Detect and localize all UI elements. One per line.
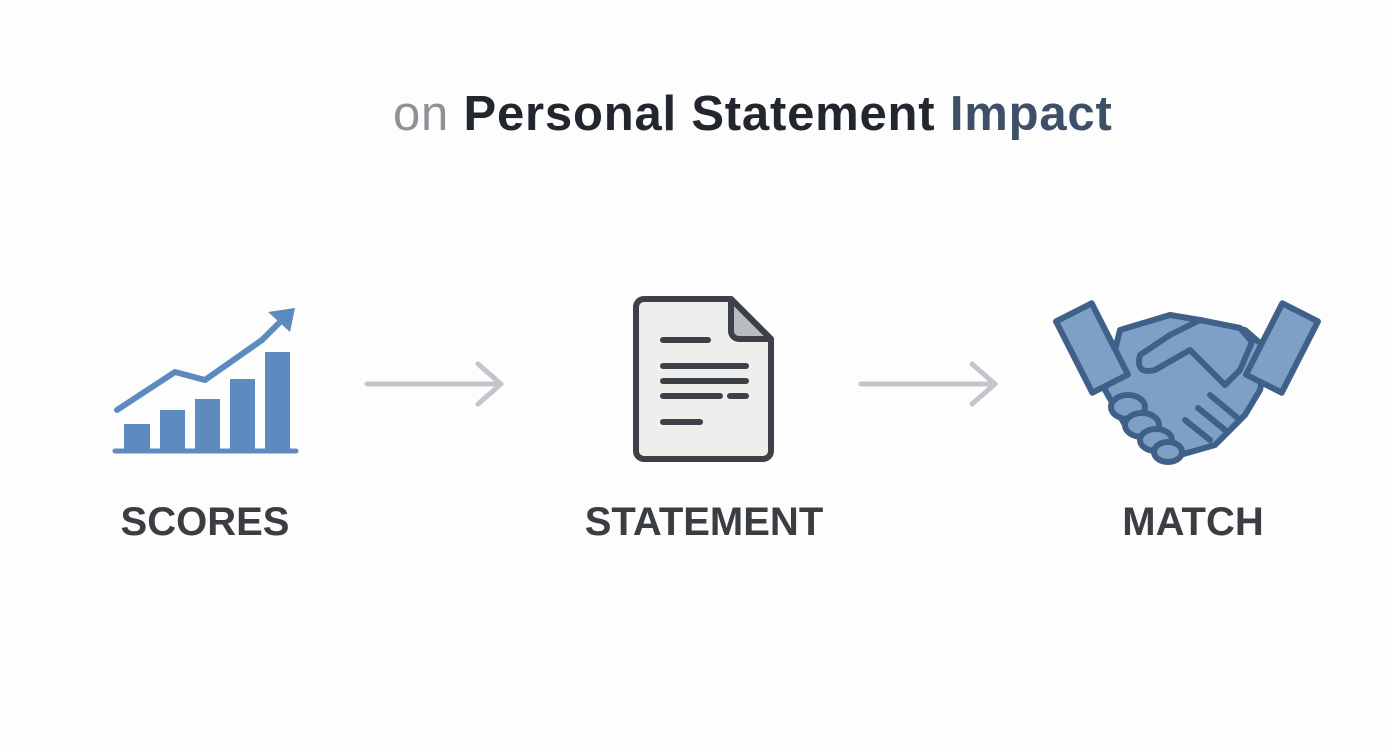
title: on Personal Statement Impact xyxy=(393,87,1113,141)
arrow 1 xyxy=(364,362,504,406)
icon: document xyxy=(633,296,774,462)
arrow 2 xyxy=(858,362,998,406)
label: match: MATCH xyxy=(1122,500,1264,544)
label: statement: STATEMENT xyxy=(585,500,823,544)
icon: handshake xyxy=(1053,300,1321,465)
label: scores: SCORES xyxy=(121,500,289,544)
